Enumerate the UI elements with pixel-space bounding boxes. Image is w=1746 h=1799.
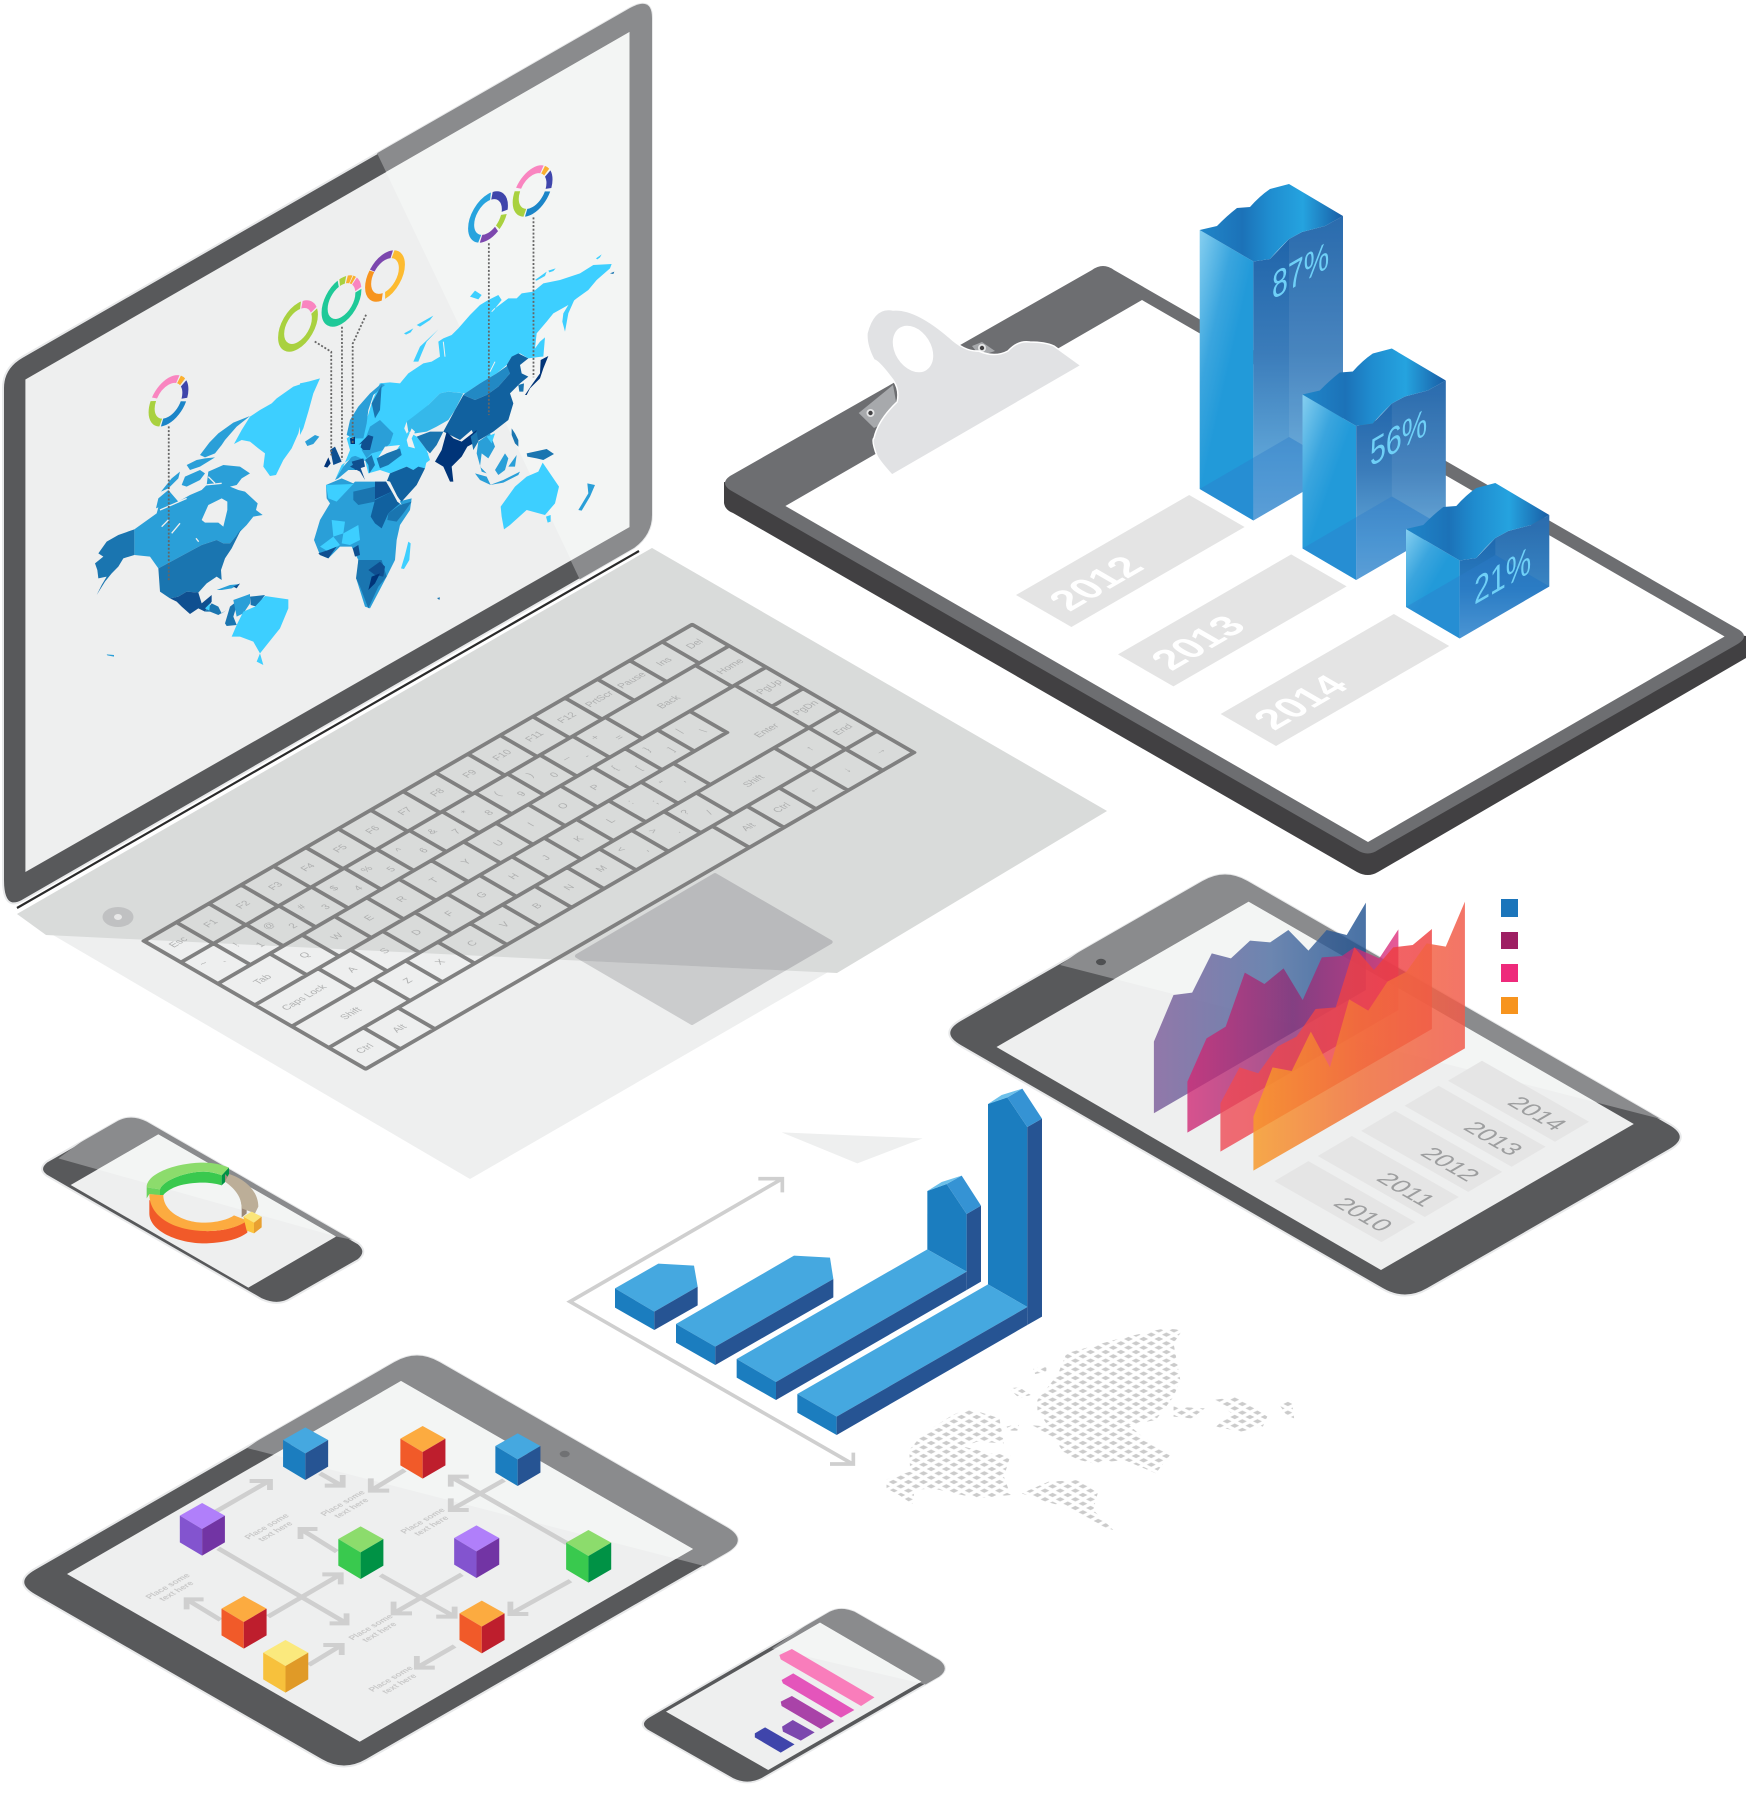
3D bar chart (570, 1089, 1042, 1464)
key legends: E (362, 914, 378, 923)
key legends: Alt (739, 821, 759, 833)
key legends: G (474, 890, 490, 900)
placeholder labels: Place some (366, 1664, 416, 1693)
key legends: ' (682, 780, 694, 787)
key legends: F5 (331, 843, 351, 855)
key legends: U (491, 839, 507, 848)
key legends: F12 (555, 711, 580, 725)
key legends: Pause (615, 671, 650, 690)
placeholder labels: Place some (242, 1512, 292, 1541)
keyboard (144, 624, 914, 1069)
key legends: S (378, 947, 393, 956)
year plate 2013 (1118, 554, 1347, 686)
key legends: F9 (460, 768, 481, 780)
key legends: * (459, 809, 472, 817)
key legends: $ (327, 884, 342, 893)
key legends: 4 (352, 884, 366, 893)
trackpad (575, 873, 833, 970)
laptop screen bezel (3, 4, 652, 903)
key legends: } (641, 746, 654, 753)
key legends: N (562, 883, 578, 892)
small phone: bar chart (643, 1609, 945, 1782)
key legends: W (329, 931, 347, 942)
small phone: ring chart (42, 1118, 363, 1303)
year labels: 2014 (1501, 1093, 1573, 1135)
key legends: > (646, 827, 661, 835)
key legends: % (359, 865, 376, 875)
key legends: End (831, 723, 856, 737)
world map (95, 254, 614, 665)
key legends: - (581, 753, 594, 760)
key legends: 7 (450, 827, 464, 836)
key legends: Caps Lock (279, 983, 330, 1012)
key legends: Home (714, 657, 747, 676)
key legends: . (672, 828, 684, 835)
key legends: 3 (319, 903, 334, 911)
donut 1 (152, 372, 185, 430)
tablet body (23, 1356, 738, 1766)
key legends: R (394, 895, 410, 904)
key legends: V (497, 920, 513, 929)
axes (570, 1179, 853, 1464)
key legends: A (345, 965, 361, 974)
clipboard body (724, 266, 1746, 875)
key legends: / (704, 809, 716, 816)
bar B (676, 1256, 833, 1365)
key legends: F4 (299, 862, 319, 873)
placeholder labels: Place some (318, 1489, 368, 1517)
year plate 2014: 2014 (1244, 669, 1359, 736)
donut 2 (281, 297, 315, 355)
bar 87% (1200, 184, 1343, 520)
key legends: | (674, 728, 686, 735)
key legends: PgDn (790, 699, 822, 717)
phone body (643, 1609, 945, 1782)
key legends: 1 (254, 941, 268, 949)
key legends: F3 (266, 880, 286, 892)
key legends: F8 (428, 787, 448, 798)
tablet: flow diagram (23, 1356, 738, 1766)
key legends: 2 (286, 922, 301, 930)
hinge line (17, 551, 639, 908)
key legends: + (588, 733, 603, 742)
key legends: H (506, 872, 522, 881)
bar 21% (1406, 483, 1549, 638)
key legends: = (613, 733, 627, 742)
flow arrows (187, 1470, 570, 1668)
laptop (3, 4, 1107, 1179)
bar C (737, 1176, 981, 1400)
key legends: ` (221, 960, 235, 967)
bar A (615, 1264, 698, 1330)
power button (102, 907, 134, 927)
placeholder labels: text here (379, 1672, 419, 1695)
map: Americas (95, 382, 308, 665)
key legends: Enter (752, 722, 783, 739)
clipboard (724, 184, 1746, 875)
label 56%: 56% (1370, 401, 1427, 476)
laptop base (17, 548, 1107, 1179)
key legends: ] (666, 746, 678, 753)
key legends: F11 (523, 730, 547, 744)
placeholder labels: text here (359, 1620, 399, 1643)
key legends: ← (805, 784, 823, 795)
key legends: F2 (234, 899, 254, 911)
key legends: T (427, 876, 442, 885)
key legends: M (594, 864, 610, 874)
year labels: 2013 (1457, 1118, 1529, 1160)
key legends: Shift (741, 773, 768, 789)
key legends: F (442, 910, 457, 918)
donut 3 (325, 272, 358, 330)
year plate 2012: 2012 (1039, 550, 1154, 617)
key legends: Alt (390, 1023, 410, 1034)
placeholder labels: text here (255, 1520, 295, 1543)
donut 4 (368, 247, 402, 305)
key legends: Q (297, 951, 313, 960)
key legends: C (465, 939, 481, 948)
key legends: 0 (548, 771, 562, 779)
key legends: Back (655, 694, 684, 711)
key legends: [ (633, 765, 646, 772)
key legends: Shift (338, 1006, 365, 1021)
phone body (42, 1118, 363, 1303)
key legends: @ (260, 921, 278, 931)
key legends: ~ (197, 959, 212, 968)
tablet: area chart (949, 874, 1681, 1296)
key legends: _ (555, 752, 571, 761)
key legends: Y (459, 858, 475, 867)
key legends: PrtScr (583, 689, 617, 709)
key legends: ! (231, 942, 243, 948)
key legends: P (588, 783, 604, 792)
donut 6 (516, 162, 549, 220)
key legends: L (604, 816, 619, 825)
year plate 2013: 2013 (1141, 610, 1256, 676)
year plate 2012 (1016, 495, 1245, 627)
placeholder labels (143, 1489, 456, 1698)
key legends: { (609, 765, 622, 772)
key legends: PgUp (754, 678, 786, 696)
key legends: ( (492, 790, 505, 798)
year labels (1327, 1093, 1573, 1236)
key legends: → (871, 746, 890, 756)
key legends: ^ (393, 847, 407, 855)
key legends: J (540, 854, 554, 862)
label 21%: 21% (1474, 539, 1531, 614)
key legends: ; (649, 799, 661, 806)
year labels: 2010 (1327, 1194, 1399, 1236)
label 87%: 87% (1272, 234, 1329, 309)
placeholder labels: Place some (398, 1506, 448, 1535)
tablet body (949, 874, 1681, 1296)
key legends: Ctrl (771, 801, 794, 815)
key legends: ) (524, 772, 537, 779)
map: Russia and Asia (380, 254, 614, 529)
key legends: O (555, 801, 572, 811)
key legends: 5 (384, 865, 399, 874)
key legends (166, 635, 896, 1057)
placeholder labels: Place some (143, 1572, 193, 1600)
key legends: Tab (251, 973, 275, 987)
legend (1501, 899, 1518, 1014)
dotted world map (887, 1328, 1294, 1530)
bar D (797, 1089, 1042, 1435)
key legends: < (614, 845, 629, 854)
key legends: F1 (201, 918, 221, 929)
key legends: Del (684, 638, 706, 651)
key legends: # (295, 903, 310, 911)
key legends: Esc (167, 935, 191, 949)
key legends: 9 (515, 790, 530, 798)
key legends: ↑ (803, 745, 817, 753)
key legends: F10 (490, 748, 515, 762)
clipboard clip (859, 309, 1081, 475)
key legends: , (640, 846, 652, 853)
key legends: D (409, 928, 425, 937)
placeholder labels: text here (331, 1496, 371, 1519)
reflection (782, 1132, 923, 1163)
area chart (1154, 902, 1465, 1171)
key legends: Z (401, 977, 416, 985)
key legends: F7 (396, 806, 416, 817)
bar 56% (1302, 348, 1446, 580)
year labels: 2011 (1370, 1169, 1442, 1211)
key legends: X (433, 958, 449, 967)
placeholder labels: text here (411, 1514, 451, 1537)
key legends: B (530, 902, 546, 911)
key legends: 8 (482, 809, 497, 817)
dotted leader lines (169, 217, 533, 580)
key legends: ↓ (841, 766, 855, 774)
key legends: I (526, 821, 538, 828)
year labels: 2012 (1414, 1144, 1486, 1185)
cubes (180, 1426, 611, 1693)
key legends: " (657, 780, 670, 787)
key legends: Ctrl (354, 1042, 377, 1055)
year plate 2014 (1221, 614, 1449, 746)
key legends: K (572, 835, 587, 844)
key legends: & (425, 827, 441, 836)
placeholder labels: text here (156, 1579, 196, 1602)
donut 5 (471, 188, 505, 246)
key legends: \ (698, 728, 710, 735)
map: Europe and Africa (300, 378, 440, 608)
ring chart (147, 1163, 262, 1243)
key legends: F6 (363, 824, 383, 836)
placeholder labels: Place some (346, 1613, 396, 1641)
year rows (1274, 1061, 1589, 1242)
key legends: : (625, 799, 637, 806)
key legends: ? (679, 808, 693, 817)
key legends: 6 (417, 846, 432, 855)
mini bars (755, 1649, 874, 1753)
key legends: Ins (654, 656, 675, 668)
